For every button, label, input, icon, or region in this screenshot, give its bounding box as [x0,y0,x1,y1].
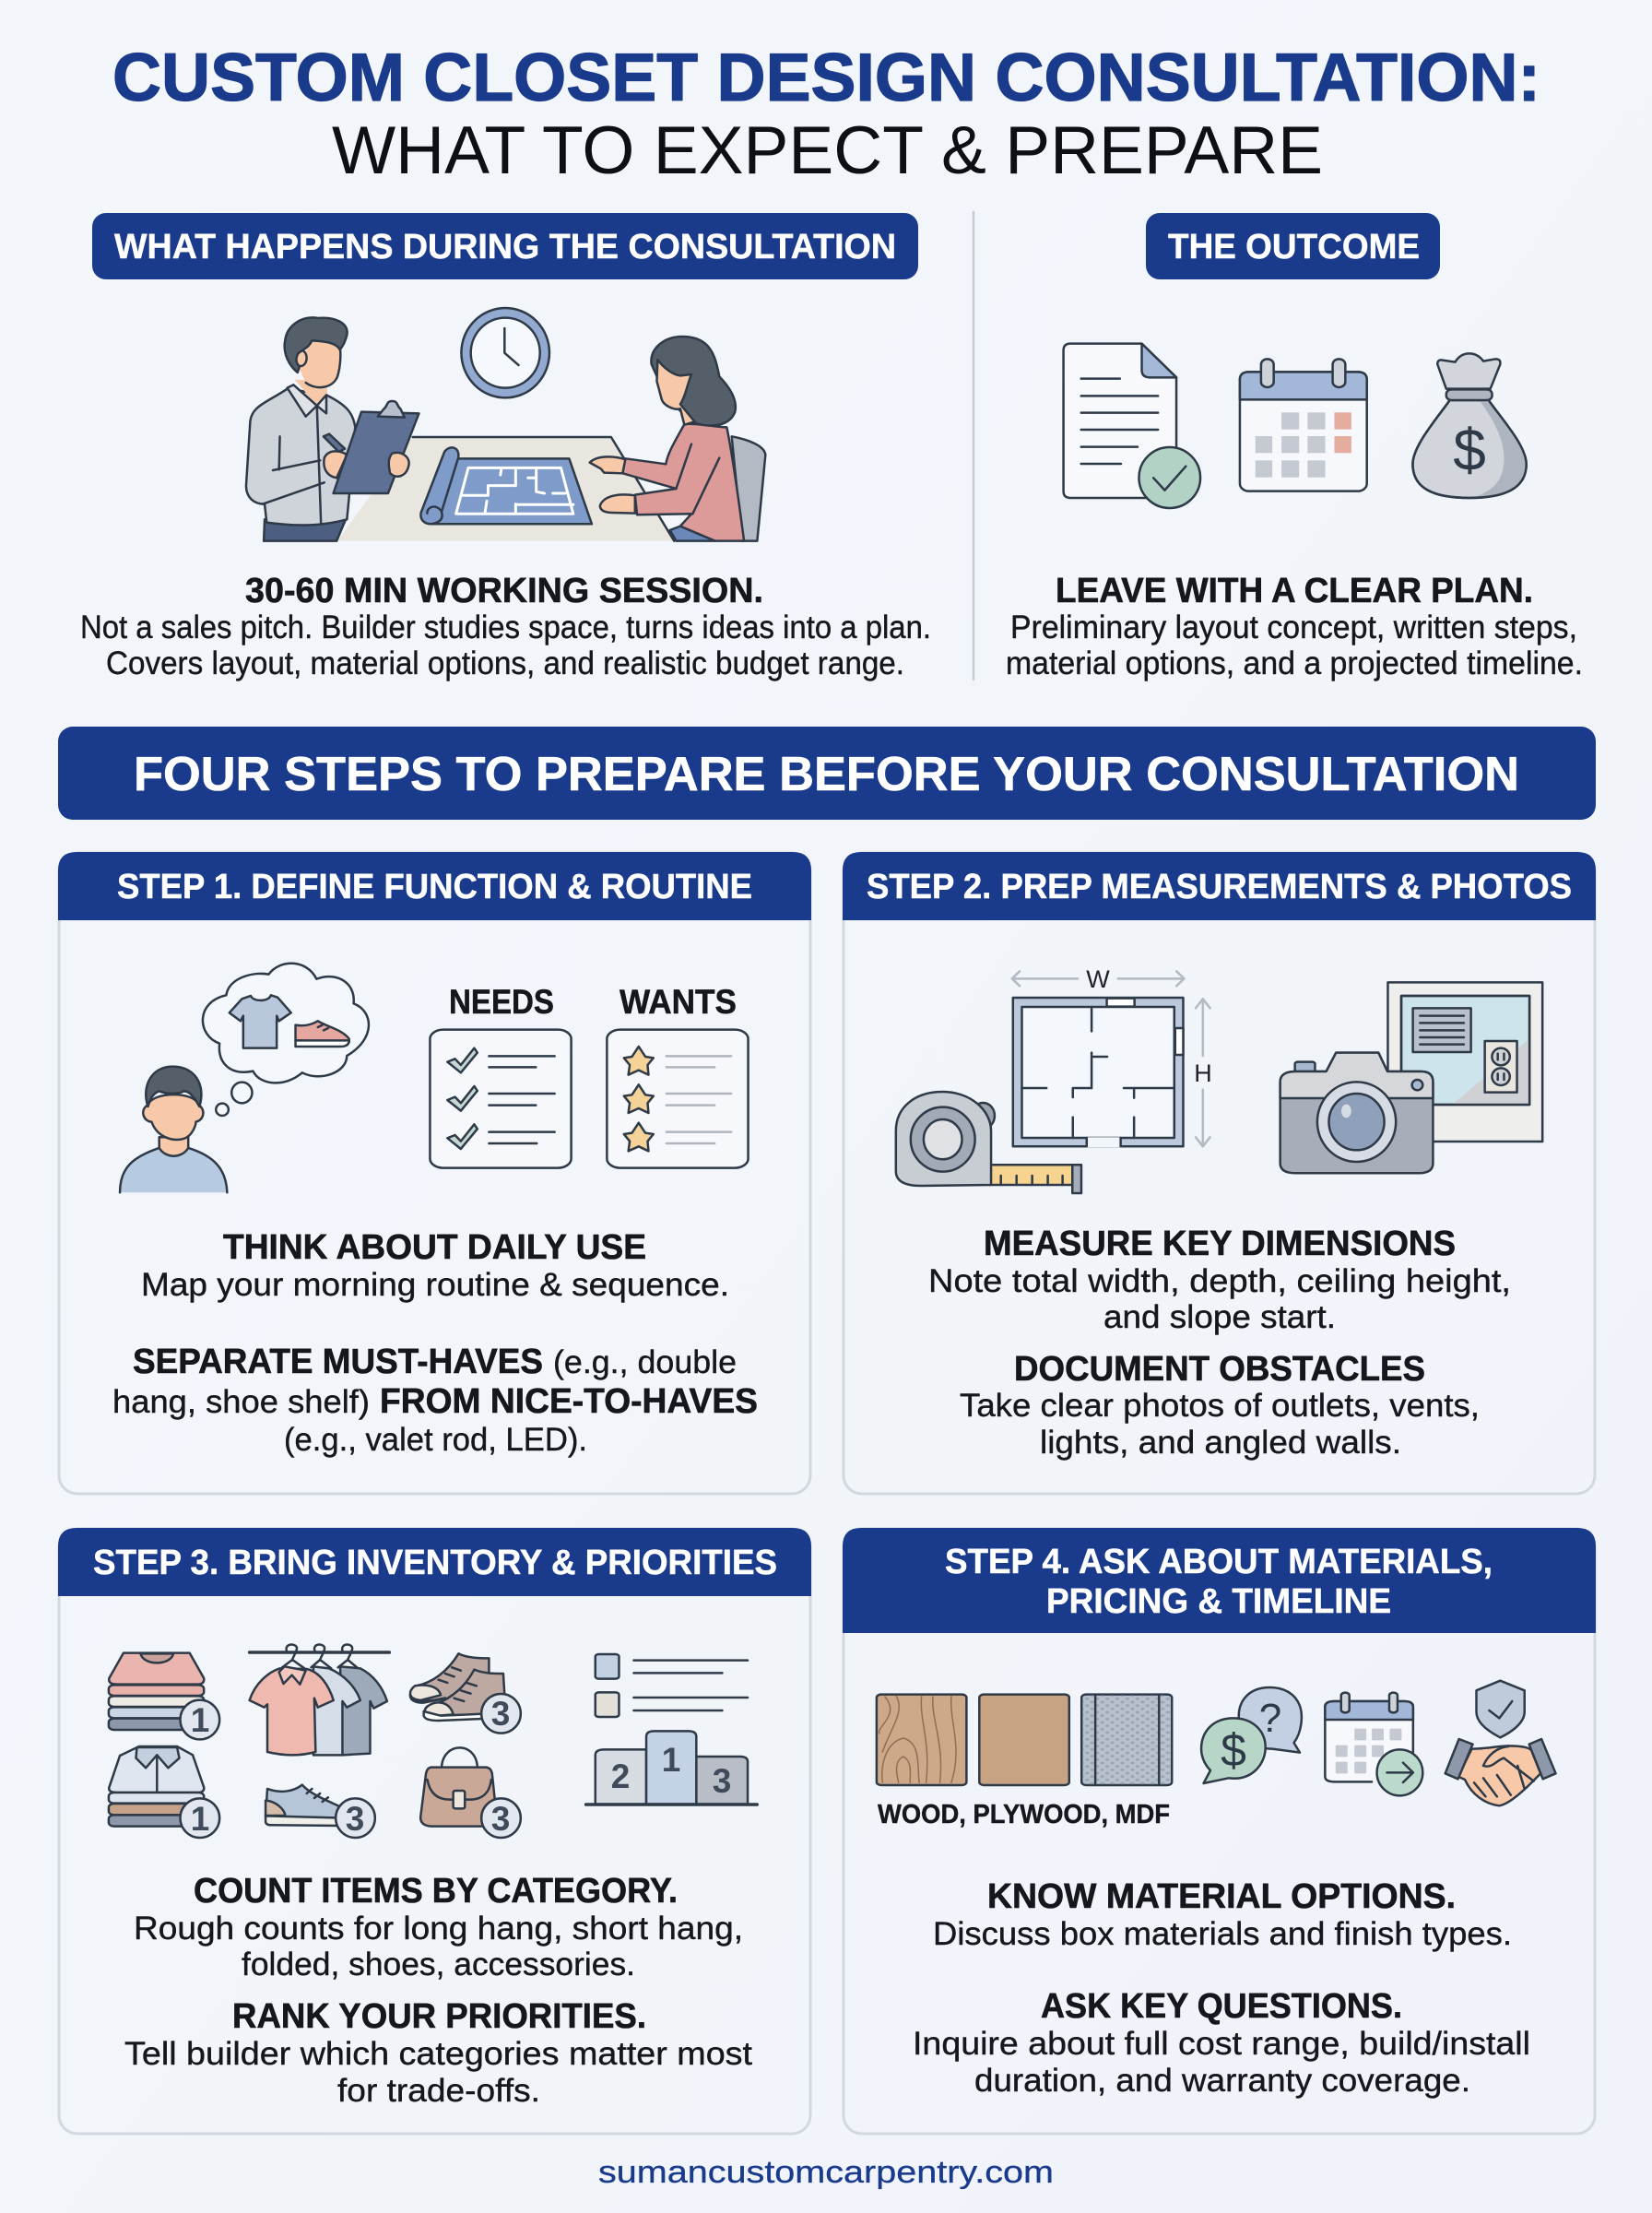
step 2 text: MEASURE KEY DIMENSIONS [984,1225,1456,1263]
step 1 text: SEPARATE MUST-HAVES [133,1343,543,1381]
step 2 text [928,1225,1511,1461]
step 3 text [124,1872,752,2109]
icon: priority list [596,1654,748,1717]
heading: the outcome [1146,213,1440,279]
text: clear plan: material options, and a projected timeline. [1006,645,1583,681]
heading: the outcome: THE OUTCOME [1168,228,1420,266]
illustration: consultation scene [246,308,765,541]
icon: speech bubbles [1201,1687,1302,1783]
needs label: NEEDS [449,983,554,1021]
step 1 text: (e.g., valet rod, LED). [284,1422,587,1458]
step 4 text: KNOW MATERIAL OPTIONS. [987,1877,1456,1916]
step 1 text: FROM NICE-TO-HAVES [380,1382,758,1421]
wants label: WANTS [620,983,737,1021]
step 4 text: Inquire about full cost range, build/install [913,2026,1530,2062]
icon: folded sweaters [109,1653,219,1739]
podium numbers: 1 [662,1741,680,1779]
step 4 text: ASK KEY QUESTIONS. [1041,1987,1402,2026]
step 4 text [913,1877,1530,2099]
illustration: outcome icons [1064,344,1527,508]
text: clear plan: LEAVE WITH A CLEAR PLAN. [1056,572,1533,610]
icon: calendar with arrow [1325,1693,1422,1795]
podium numbers: 2 [611,1757,630,1795]
panel: step 3 [58,1528,811,2134]
step 1 header: STEP 1. DEFINE FUNCTION & ROUTINE [117,868,752,906]
text: working session: Not a sales pitch. Builder studies space, turns ideas into a plan. [80,609,931,645]
step 1 text: THINK ABOUT DAILY USE [223,1228,646,1267]
count badges: 1 [191,1701,209,1739]
icon: handbag [420,1747,521,1838]
step 2 text: Note total width, depth, ceiling height, [928,1263,1511,1299]
icon: sneaker [266,1785,375,1838]
icon: clock [461,308,549,397]
text: clear plan: Preliminary layout concept, written steps, [1010,609,1577,645]
step 3 text: for trade-offs. [337,2073,540,2109]
icon: folded shirts [109,1746,219,1838]
man with clipboard [246,317,419,541]
icon: wants star list [607,1030,749,1168]
text: clear plan [1006,572,1583,681]
icon: handshake [1446,1739,1556,1805]
step 3 header: STEP 3. BRING INVENTORY & PRIORITIES [93,1544,777,1582]
title: CUSTOM CLOSET DESIGN CONSULTATION: [112,41,1540,115]
swatch: wood [877,1695,966,1785]
title: WHAT TO EXPECT & PREPARE [332,113,1323,188]
step 3 header [58,1528,811,1596]
step 4 header [843,1528,1596,1633]
money bag dollar sign: $ [1453,417,1486,483]
heading: what happens during the consultation [92,213,918,279]
podium numbers [611,1741,731,1800]
panel: step 2 [843,852,1596,1494]
icon: hanging shirts [250,1645,389,1755]
step 1 text: (e.g., double [553,1344,737,1380]
step 1 header [58,852,811,920]
step 1 text [112,1228,758,1458]
count badges: 1 [191,1800,209,1838]
step 4 header: STEP 4. ASK ABOUT MATERIALS, [945,1543,1493,1581]
icon: money bag [1412,353,1527,498]
step 3 text: RANK YOUR PRIORITIES. [232,1997,646,2036]
step 3 text: COUNT ITEMS BY CATEGORY. [194,1872,678,1911]
banner: four steps [58,727,1596,820]
step 2 text: and slope start. [1103,1299,1336,1335]
icon: calendar [1240,359,1367,491]
title [112,41,1540,188]
step 4 text: Discuss box materials and finish types. [933,1916,1512,1952]
step 2 text: lights, and angled walls. [1040,1425,1401,1461]
illustration: person thinking of clothes [120,964,369,1192]
step 2 header [843,852,1596,920]
podium numbers: 3 [713,1762,731,1800]
icon: tape measure [896,1092,1081,1193]
dimension label W: W [1086,965,1110,993]
dimension label H: H [1194,1059,1212,1087]
step 4 text: duration, and warranty coverage. [974,2063,1470,2099]
illustration: materials and questions [877,1681,1556,1805]
panel: step 4 [843,1528,1596,2134]
swatch: MDF [1081,1695,1172,1785]
text: working session [80,572,931,681]
step 2 text: Take clear photos of outlets, vents, [960,1388,1480,1424]
text: working session: 30-60 MIN WORKING SESSION. [245,572,763,610]
step 3 text: Rough counts for long hang, short hang, [134,1911,743,1947]
footer url: sumancustomcarpentry.com [598,2155,1054,2190]
step 3 text: folded, shoes, accessories. [242,1947,635,1982]
panel: step 1 [58,852,811,1494]
question mark: ? [1259,1696,1281,1741]
icon: needs checklist [430,1030,572,1168]
step 4 header: PRICING & TIMELINE [1046,1582,1391,1621]
dollar sign: $ [1221,1724,1246,1776]
illustration: clothing inventory [109,1645,757,1838]
table with blueprint [337,437,674,541]
illustration: floor plan with dimensions [1012,971,1210,1147]
step 2 text: DOCUMENT OBSTACLES [1014,1350,1425,1389]
count badges [191,1695,510,1838]
step 1 text: hang, shoe shelf) [112,1384,370,1420]
count badges: 3 [491,1695,510,1733]
icon: document with check [1064,344,1200,508]
count badges: 3 [346,1800,364,1838]
step 1 text: Map your morning routine & sequence. [141,1267,729,1303]
text: working session: Covers layout, material options, and realistic budget range. [106,645,904,681]
icon: podium [586,1731,757,1805]
step 2 header: STEP 2. PREP MEASUREMENTS & PHOTOS [867,868,1572,906]
icon: camera and obstacle photo [1280,982,1542,1173]
heading: what happens during the consultation: WHAT HAPPENS DURING THE CONSULTATION [114,228,896,266]
banner: four steps: FOUR STEPS TO PREPARE BEFORE YOUR CONSULTATION [134,748,1519,801]
swatch: plywood [979,1695,1069,1785]
icon: boots [410,1653,521,1734]
woman at table [590,337,765,541]
step 3 text: Tell builder which categories matter most [124,2036,752,2072]
icon: shield [1476,1681,1525,1737]
count badges: 3 [491,1800,510,1838]
materials caption: WOOD, PLYWOOD, MDF [878,1800,1170,1829]
